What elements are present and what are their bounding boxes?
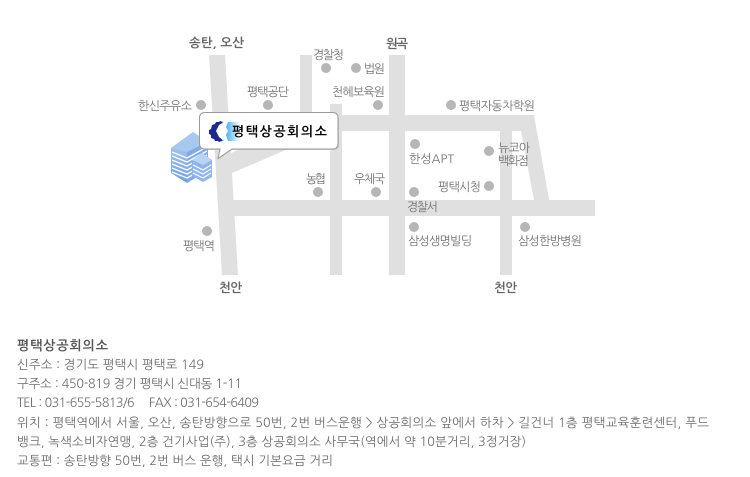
direction labels: 천안 bbox=[219, 281, 242, 294]
place markers and labels: 농협 bbox=[306, 173, 326, 185]
text block: address and directions: 평택상공회의소 bbox=[17, 338, 108, 352]
road map bbox=[209, 55, 595, 275]
direction labels: 원곡 bbox=[386, 37, 408, 50]
text block: address and directions: TEL : 031-655-5813/6 FAX : 031-654-6409 bbox=[17, 396, 259, 409]
place markers and labels: 경찰서 bbox=[407, 201, 438, 213]
callout: chamber of commerce: 평택상공회의소 bbox=[232, 124, 327, 138]
place markers and labels: 우체국 bbox=[354, 173, 385, 185]
text block: address and directions: 신주소 : 경기도 평택시 평택로 149 bbox=[17, 358, 204, 371]
place markers and labels: 경찰청 bbox=[313, 49, 344, 61]
icon: office building bbox=[171, 132, 212, 183]
direction labels bbox=[189, 36, 517, 294]
place markers and labels: 한신주유소 bbox=[138, 100, 192, 112]
place markers and labels: 삼성한방병원 bbox=[518, 235, 582, 247]
place markers and labels: 평택시청 bbox=[438, 181, 481, 193]
text block: address and directions bbox=[17, 338, 709, 467]
direction labels: 천안 bbox=[494, 281, 517, 294]
text block: address and directions: 교통편 : 송탄방향 50번, 2번 버스 운행, 택시 기본요금 거리 bbox=[17, 454, 333, 467]
place markers and labels: 뉴코아 bbox=[498, 142, 530, 154]
text block: address and directions: 위치 : 평택역에서 서울, 오산, 송탄방향으로 50번, 2번 버스운행 > 상공회의소 앞에서 하차 > 길건너 1층 평택교육훈련센터, 푸드 bbox=[17, 416, 709, 429]
place markers and labels: 법원 bbox=[364, 63, 385, 75]
place markers and labels: 한성APT bbox=[409, 153, 454, 165]
place markers and labels: 천혜보육원 bbox=[332, 86, 385, 98]
text block: address and directions: 구주소 : 450-819 경기 평택시 신대동 1-11 bbox=[17, 377, 242, 390]
place markers and labels: 백화점 bbox=[498, 154, 529, 167]
place markers and labels: 평택역 bbox=[183, 240, 215, 252]
place markers and labels: 삼성생명빌딩 bbox=[408, 234, 472, 247]
icon: gear logo bbox=[209, 121, 240, 142]
text block: address and directions: 뱅크, 녹색소비자연맹, 2층 건기사업(주), 3층 상공회의소 사무국(역에서 약 10분거리, 3정거장) bbox=[17, 435, 526, 448]
callout: chamber of commerce bbox=[200, 112, 339, 160]
place markers and labels: 평택자동차학원 bbox=[459, 100, 535, 112]
direction labels: 송탄, 오산 bbox=[189, 36, 244, 49]
place markers and labels bbox=[138, 49, 582, 252]
place markers and labels: 평택공단 bbox=[247, 86, 289, 98]
